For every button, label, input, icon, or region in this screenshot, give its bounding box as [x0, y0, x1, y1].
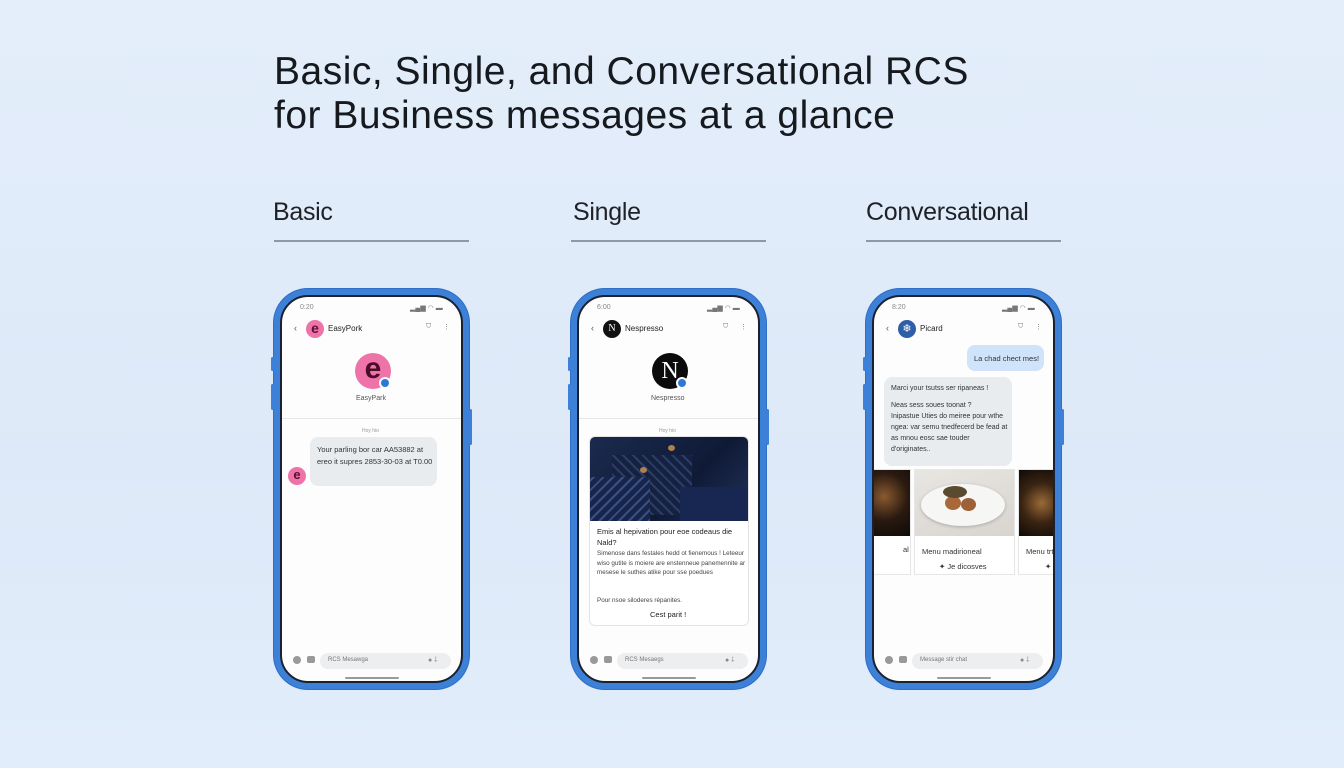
- phone: single: [571, 289, 766, 689]
- phone: conversational: ▂▄▆ ◠ ▬: [1002, 305, 1035, 312]
- phone: conversational: [866, 289, 1061, 689]
- carousel: al: [903, 545, 909, 554]
- phone: basic: RCS Mesawga: [328, 657, 368, 663]
- phone: conversational: ‹: [886, 323, 889, 333]
- bot bubble: [884, 377, 1012, 466]
- icon: nespresso avatar: N: [608, 323, 616, 334]
- phone: basic: Your parling bor car AA53882 at ereo it supres 2853-30-03 at T0.00: [317, 445, 432, 466]
- phone: single: ‹: [591, 323, 594, 333]
- phone: single: 6:00: [597, 304, 611, 311]
- phone: basic: ⋮: [443, 324, 450, 331]
- phone: conversational: ✦: [1045, 562, 1051, 571]
- phone: single: ⋮: [740, 324, 747, 331]
- icon: picard avatar: [898, 320, 916, 338]
- rich card: Emis al hepivation pour eoe codeaus die Nald?: [597, 527, 732, 547]
- rich card: Cest parit !: [650, 610, 686, 619]
- rich card: Pour nsoe siloderes répanites.: [597, 597, 682, 604]
- phone: basic: 0:20: [300, 304, 314, 311]
- icon: easypark avatar: [306, 320, 324, 338]
- phone: single: N: [661, 358, 679, 384]
- phone: single: Nespresso: [651, 395, 684, 402]
- user bubble: [967, 345, 1044, 371]
- phone: conversational: ✦ Je dicosves: [939, 562, 987, 571]
- phone: conversational: La chad chect mes!: [974, 354, 1039, 363]
- rich card: [589, 436, 749, 626]
- phone: conversational: Marci your tsutss ser ripaneas !: [891, 385, 988, 392]
- icon: picard avatar: ❄: [902, 323, 912, 335]
- phone: basic: EasyPark: [356, 395, 386, 402]
- icon: nespresso avatar: [603, 320, 621, 338]
- phone: conversational: Picard: [920, 324, 943, 333]
- carousel: [872, 469, 911, 575]
- icon: easypark avatar: e: [311, 320, 319, 336]
- message bubble: [310, 437, 437, 486]
- phone: conversational: Neas sess soues toonat ?: [891, 402, 972, 409]
- phone: conversational: ● ⸸: [1020, 657, 1029, 664]
- heading: conversational: Conversational: [866, 198, 1029, 226]
- phone: basic: ⛉: [426, 323, 431, 330]
- big avatar: [355, 353, 391, 389]
- heading: basic: Basic: [273, 198, 333, 226]
- phone: conversational: Menu trt: [1026, 547, 1054, 556]
- title: Basic, Single, and Conversational RCS: [274, 50, 969, 93]
- rich card: Simenose dans festales hedd ot fienemous ! Leteeur wiso gutite is moiere are enstenneue panemennite ar mesese le suthes atike pour sse poedues: [597, 550, 745, 576]
- title: [274, 50, 969, 137]
- heading: single: Single: [573, 198, 641, 226]
- phone: basic: [274, 289, 469, 689]
- phone: basic: ▂▄▆ ◠ ▬: [410, 305, 443, 312]
- phone: conversational: Menu madirioneal: [922, 547, 982, 556]
- phone: single: RCS Mesaegs: [625, 657, 664, 663]
- phone: conversational: Message stir chat: [920, 657, 967, 663]
- phone: conversational: Inipastue Uties do meiree pour wthe ngea: var semu tnedfecerd be fead at as mnou eosc sae touder d'originates..: [891, 413, 1007, 453]
- phone: single: Hoy hio: [659, 428, 676, 434]
- phone: single: Nespresso: [625, 324, 663, 333]
- phone: single: ⛉: [723, 323, 728, 330]
- phone: single: ▂▄▆ ◠ ▬: [707, 305, 740, 312]
- phone: basic: Hoy hio: [362, 428, 379, 434]
- big avatar: e: [365, 352, 381, 385]
- input bar: [293, 656, 301, 664]
- phone: basic: ● ⸸: [428, 657, 437, 664]
- phone: basic: ‹: [294, 323, 297, 333]
- phone: conversational: 8:20: [892, 304, 906, 311]
- phone: conversational: ⋮: [1035, 324, 1042, 331]
- phone: basic: EasyPork: [328, 324, 362, 333]
- title: for Business messages at a glance: [274, 94, 895, 137]
- phone: single: ● ⸸: [725, 657, 734, 664]
- phone: conversational: ⛉: [1018, 323, 1023, 330]
- phone: basic: e: [293, 467, 301, 482]
